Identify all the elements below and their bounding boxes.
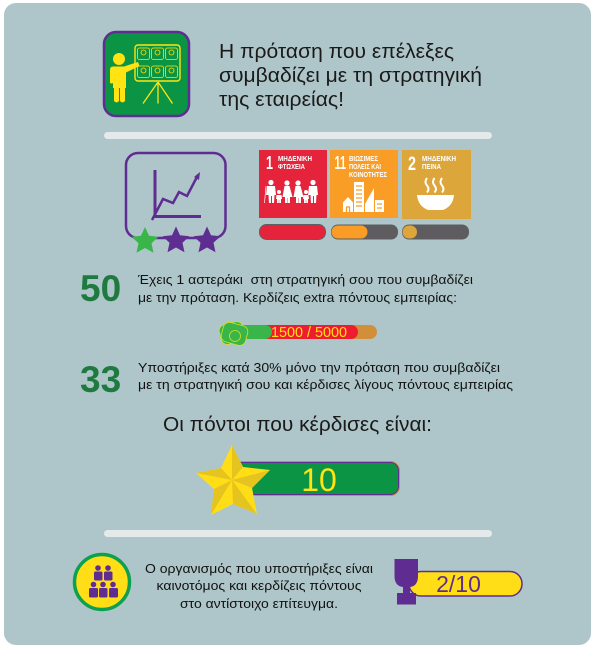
heading: proposal matches strategy: συμβαδίζει με τη στρατηγική [219, 65, 482, 87]
score bar: points total: 10 [301, 462, 337, 498]
progress bar: experience points [218, 320, 377, 347]
text: bonus explanation [137, 272, 473, 305]
icon: banknotes [218, 320, 249, 347]
heading: points earned: Οι πόντοι που κέρδισες είναι: [163, 414, 432, 436]
panel: SDG card 2 zero hunger: ΜΗΔΕΝΙΚΗ [422, 154, 456, 163]
text: achievement explanation: Ο οργανισμός που υποστήριξες είναι [145, 561, 373, 576]
progress bar: SDG 2 [402, 224, 469, 240]
text: support explanation [138, 360, 513, 392]
panel: SDG card 11 sustainable cities: ΒΙΩΣΙΜΕΣ [349, 154, 378, 163]
text: support explanation: με τη στρατηγική σου και κέρδισες λίγους πόντους εμπειρίας [138, 377, 513, 392]
panel: SDG card 2 zero hunger: 2 [408, 154, 416, 175]
panel: SDG card 1 no poverty [259, 150, 327, 218]
icon: community group badge [74, 554, 130, 610]
heading: proposal matches strategy: της εταιρείας! [219, 89, 344, 111]
panel: SDG card 11 sustainable cities: ΠΟΛΕΙΣ ΚΑΙ [349, 162, 381, 171]
icon: trophy cup [394, 559, 418, 604]
text: achievement explanation: καινοτόμος και κερδίζεις πόντους [156, 578, 362, 593]
panel: SDG card 1 no poverty: 1 [266, 153, 273, 173]
icon: green star [132, 227, 158, 253]
progress bar: experience points: 1500 / 5000 [271, 325, 347, 341]
number: bonus points 50: 50 [80, 268, 121, 309]
panel: SDG card 11 sustainable cities: ΚΟΙΝΟΤΗΤΕΣ [349, 170, 387, 179]
score bar: points total [225, 462, 400, 498]
panel: SDG card 1 no poverty: ΜΗΔΕΝΙΚΗ [278, 154, 312, 163]
text: support explanation: Υποστήριξες κατά 30% μόνο την πρόταση που συμβαδίζει [138, 360, 500, 375]
icon: gold star [196, 445, 270, 515]
panel: SDG card 11 sustainable cities [330, 150, 398, 218]
number: points 33: 33 [80, 359, 121, 400]
panel: SDG card 1 no poverty: ΦΤΩΧΕΙΑ [278, 162, 305, 171]
panel: SDG card 11 sustainable cities: 11 [334, 153, 346, 173]
progress bar: SDG 1 [260, 224, 326, 240]
score bar: achievement 2/10 [409, 571, 522, 597]
text: achievement explanation [145, 561, 373, 611]
heading: proposal matches strategy [219, 41, 482, 111]
score bar: achievement 2/10: 2/10 [436, 571, 481, 597]
text: bonus explanation: με την πρόταση. Κερδίζεις extra πόντους εμπειρίας: [138, 290, 457, 305]
icon: strategy chart with star rating [126, 153, 226, 253]
icon: purple star [162, 226, 190, 252]
heading: proposal matches strategy: Η πρόταση που επέλεξες [219, 41, 454, 63]
icon: purple star [194, 226, 220, 252]
progress bar: SDG 11 [331, 224, 398, 240]
panel: SDG card 2 zero hunger [402, 150, 471, 219]
text: achievement explanation: στο αντίστοιχο επίτευγμα. [180, 596, 338, 611]
text: bonus explanation: Έχεις 1 αστεράκι στη στρατηγική σου που συμβαδίζει [137, 272, 473, 287]
panel: SDG card 2 zero hunger: ΠΕΙΝΑ [422, 162, 441, 171]
icon: presenter at board [104, 32, 189, 116]
